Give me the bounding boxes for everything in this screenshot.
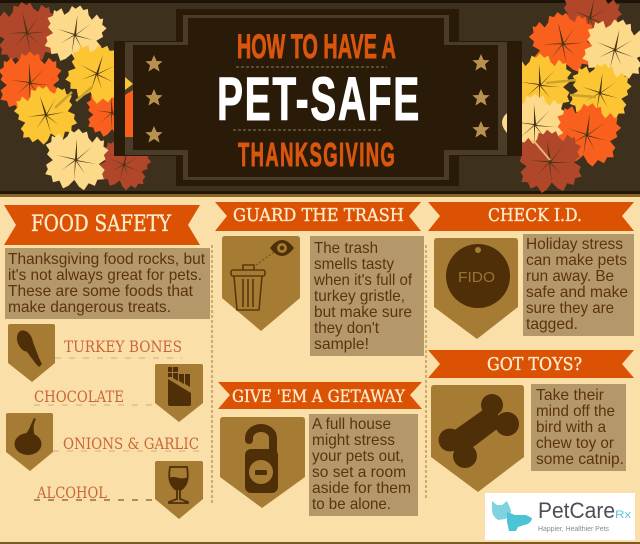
banner: check id: CHECK I.D.	[488, 205, 582, 226]
panel: got toys	[428, 350, 634, 492]
text block: toys	[531, 384, 626, 471]
title divider bottom	[233, 129, 383, 131]
banner: give em a getaway	[218, 382, 422, 409]
icon: fido tag	[434, 238, 518, 339]
text block: getaway: might stress	[312, 432, 395, 449]
text block: food intro: These are some foods that	[8, 283, 194, 300]
text block: check id: tagged.	[526, 316, 578, 333]
text block: toys: Take their	[536, 387, 605, 404]
text block: getaway: so set a room	[312, 464, 406, 481]
icon: trash can and eye	[222, 236, 300, 331]
text block: trash: turkey gristle,	[314, 288, 405, 305]
title divider top	[236, 66, 387, 68]
column dividers	[212, 245, 426, 503]
text block: check id: sure they are	[526, 300, 614, 317]
text block: check id	[523, 234, 634, 336]
text block: food intro	[5, 248, 210, 319]
icon: bone	[431, 385, 524, 492]
banner: got toys	[428, 350, 634, 378]
banner: food safety	[4, 205, 200, 245]
text block: trash: smells tasty	[314, 256, 394, 273]
text block: toys: mind off the	[536, 403, 615, 420]
panel: food safety	[4, 205, 210, 519]
header band	[0, 0, 640, 197]
title plaque	[114, 9, 522, 186]
text block: trash: when it's full of	[313, 272, 413, 289]
title: how to have a: HOW TO HAVE A	[237, 27, 396, 65]
bottom edge	[0, 542, 640, 544]
right leaf cluster	[504, 0, 640, 195]
logo: petcarerx: Happier, Healthier Pets	[538, 524, 609, 533]
stars right	[472, 54, 490, 138]
text block: getaway: your pets out,	[312, 448, 404, 465]
item: alcohol	[34, 461, 203, 519]
text block: trash: The trash	[314, 240, 378, 257]
panel: guard the trash	[215, 202, 424, 356]
text block: check id: run away. Be	[526, 268, 614, 285]
panel: give 'em a getaway	[218, 382, 422, 516]
logo: petcarerx: PetCare	[538, 498, 615, 523]
item: turkey bones	[8, 324, 182, 382]
text block: check id: can make pets	[526, 252, 627, 269]
stars left	[145, 55, 163, 143]
text block: trash: sample!	[314, 336, 369, 353]
icon: fido tag: FIDO	[458, 269, 495, 286]
text block: trash: but make sure	[314, 304, 412, 321]
text block: trash: they don't	[314, 320, 380, 337]
logo: petcarerx: Rx	[615, 509, 632, 521]
banner: guard the trash	[215, 202, 421, 231]
text block: toys: bird with a	[536, 419, 606, 436]
text block: getaway	[309, 414, 418, 516]
text block: food intro: make dangerous treats.	[8, 299, 171, 316]
banner: give em a getaway: GIVE 'EM A GETAWAY	[232, 387, 406, 407]
text block: trash	[310, 236, 424, 356]
text block: check id: Holiday stress	[526, 236, 623, 253]
logo: petcarerx	[485, 493, 635, 540]
text block: getaway: aside for them	[312, 480, 411, 497]
title: thanksgiving: THANKSGIVING	[238, 136, 395, 173]
banner: guard the trash: GUARD THE TRASH	[233, 205, 404, 226]
text block: food intro: Thanksgiving food rocks, but	[8, 251, 206, 268]
banner: food safety: FOOD SAFETY	[31, 212, 171, 237]
item: chocolate: CHOCOLATE	[34, 387, 124, 406]
left leaf cluster	[0, 0, 155, 195]
text block: getaway: to be alone.	[312, 496, 391, 513]
icon: door hanger	[220, 417, 305, 508]
text block: toys: some catnip.	[536, 451, 624, 468]
title: pet-safe: PET-SAFE	[217, 65, 419, 133]
banner: got toys: GOT TOYS?	[487, 354, 582, 375]
item: onions and garlic: ONIONS & GARLIC	[63, 434, 199, 453]
panel: check id	[428, 202, 634, 339]
item: turkey bones: TURKEY BONES	[64, 337, 182, 356]
item: alcohol: ALCOHOL	[36, 483, 107, 502]
text block: getaway: A full house	[312, 416, 391, 433]
banner: check id	[428, 202, 634, 231]
text block: food intro: it's not always great for pets.	[8, 267, 202, 284]
item: onions and garlic	[6, 413, 199, 471]
text block: toys: chew toy or	[536, 435, 615, 452]
item: chocolate	[34, 364, 203, 422]
text block: check id: safe and make	[526, 284, 628, 301]
